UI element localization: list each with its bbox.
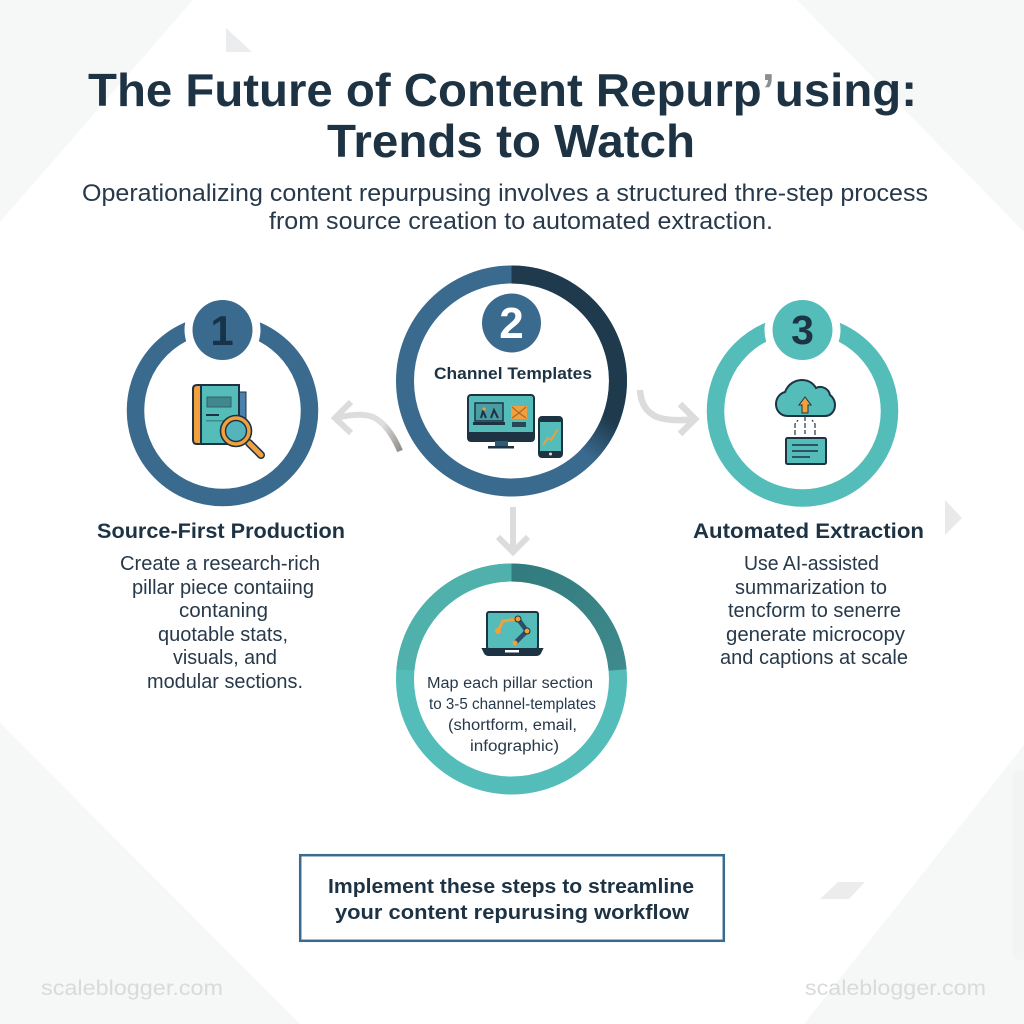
number badge 3 xyxy=(772,300,832,360)
step 3 heading: Automated Extraction xyxy=(693,519,924,543)
step 1 description xyxy=(120,553,320,693)
step 1 description: quotable stats, xyxy=(158,624,288,646)
call to action box xyxy=(300,855,724,941)
step 1 description: contaning xyxy=(179,600,268,622)
footer watermark left: scaleblogger.com xyxy=(41,977,223,1000)
icon: book with magnifier xyxy=(193,385,261,455)
step 3 description: tencform to senerre xyxy=(728,600,901,622)
step 3 description: generate microcopy xyxy=(726,624,905,646)
icon: cloud upload and document xyxy=(776,380,835,464)
arrow from step 2 to step 3 xyxy=(640,390,695,434)
step 3 description: summarization to xyxy=(735,577,887,599)
title xyxy=(88,64,917,167)
call to action box: Implement these steps to streamline xyxy=(328,875,694,898)
arrow down xyxy=(498,507,528,552)
arrow from step 2 to step 1 xyxy=(335,402,400,451)
number badge 2: 2 xyxy=(499,299,524,348)
step 1 heading: Source-First Production xyxy=(97,519,345,543)
subtitle xyxy=(82,180,928,235)
subtitle: from source creation to automated extraction. xyxy=(269,208,773,235)
call to action box: your content repurusing workflow xyxy=(335,901,689,924)
step 1 description: visuals, and xyxy=(173,647,277,669)
title: The Future of Content Repurp ’using: xyxy=(88,64,917,116)
title: Trends to Watch xyxy=(327,115,695,167)
step 1 ring xyxy=(136,292,310,498)
subtitle: Operationalizing content repurpusing involves a structured thre-step process xyxy=(82,180,928,207)
number badge 1 xyxy=(192,300,252,360)
bottom ring description: infographic) xyxy=(470,738,559,755)
step 2 heading: Channel Templates xyxy=(434,365,592,383)
number badge 2 xyxy=(482,294,541,352)
step 1 description: Create a research-rich xyxy=(120,553,320,575)
bottom ring description xyxy=(427,675,596,755)
bottom ring description: Map each pillar section xyxy=(427,675,593,692)
number badge 3: 3 xyxy=(791,307,814,353)
bottom ring xyxy=(405,572,618,786)
step 3 description xyxy=(720,553,908,669)
step 3 description: Use AI-assisted xyxy=(744,553,879,575)
step 3 description: and captions at scale xyxy=(720,647,908,669)
step 2 ring xyxy=(405,274,618,488)
number badge 1: 1 xyxy=(210,307,234,354)
bottom ring description: (shortform, email, xyxy=(448,717,577,734)
footer watermark right: scaleblogger.com xyxy=(805,977,986,1000)
step 1 description: modular sections. xyxy=(147,671,303,693)
icon: laptop with robotic arm xyxy=(483,612,542,655)
step 3 ring xyxy=(716,292,890,498)
step 1 description: pillar piece contaiing xyxy=(132,577,314,599)
bottom ring description: to 3-5 channel-templates xyxy=(429,696,596,713)
icon: monitor and phone xyxy=(468,395,562,457)
